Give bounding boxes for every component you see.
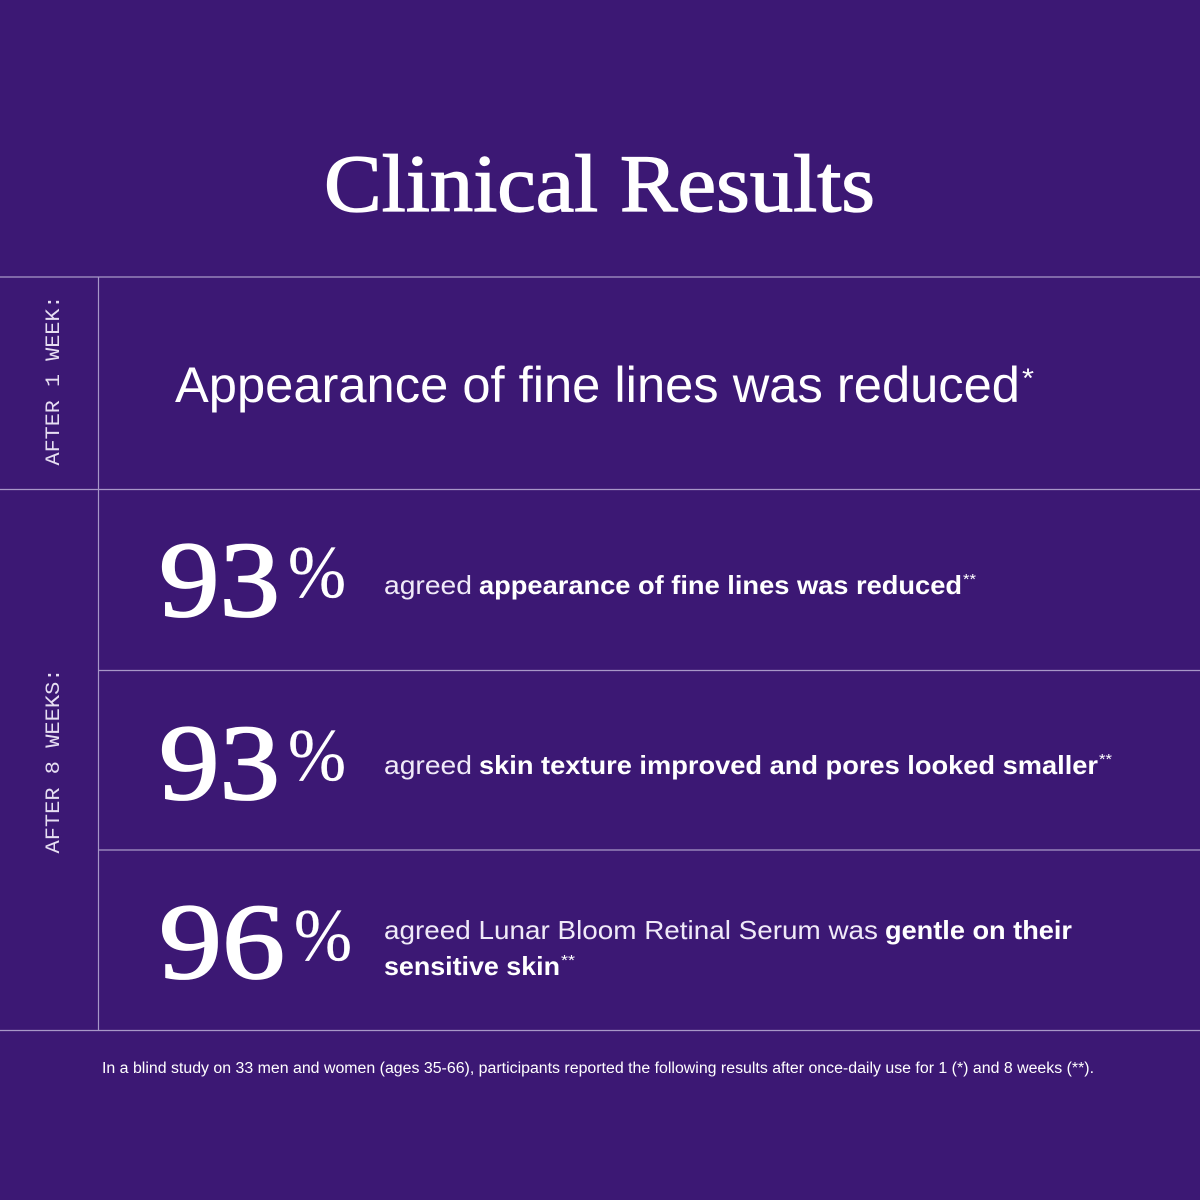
panel: fine lines statistic xyxy=(159,521,976,640)
statement: gentle on sensitive skin: gentle on their xyxy=(885,915,1072,945)
footnote: In a blind study on 33 men and women (ages 35-66), participants reported the following results after once-daily use for 1 (*) and 8 weeks (**). xyxy=(102,1060,1094,1077)
number: 96%: % xyxy=(294,895,352,977)
statement: skin texture: skin texture improved and pores looked smaller xyxy=(479,750,1098,780)
number: 93%: % xyxy=(288,715,346,797)
statement: skin texture: agreed xyxy=(384,750,472,780)
statement: gentle on sensitive skin: sensitive skin xyxy=(384,951,560,981)
panel: after 1 week result: * xyxy=(1022,363,1035,393)
statement: fine lines: appearance of fine lines was reduced xyxy=(479,570,962,600)
statement: gentle on sensitive skin: ** xyxy=(561,952,575,969)
number: 93%: % xyxy=(288,532,346,614)
statement: fine lines: agreed xyxy=(384,570,472,600)
number: 93%: 93 xyxy=(159,704,280,823)
title: Clinical Results xyxy=(324,138,875,229)
number: 96% xyxy=(159,883,352,1002)
side label: after 8 weeks: AFTER 8 WEEKS: xyxy=(43,668,66,854)
number: 93%: 93 xyxy=(159,521,280,640)
side label: after 1 week: AFTER 1 WEEK: xyxy=(43,296,66,466)
panel: skin texture statistic xyxy=(159,704,1112,823)
panel: gentle on skin statistic xyxy=(159,883,1072,1002)
panel: after 1 week result: Appearance of fine lines was reduced xyxy=(175,357,1020,413)
statement: fine lines: ** xyxy=(963,571,976,588)
number: 93% xyxy=(159,704,346,823)
statement: skin texture: ** xyxy=(1099,751,1112,768)
statement: gentle on sensitive skin xyxy=(384,915,1072,981)
statement: gentle on sensitive skin: agreed Lunar Bloom Retinal Serum was xyxy=(384,915,878,945)
number: 96%: 96 xyxy=(159,883,285,1002)
number: 93% xyxy=(159,521,346,640)
